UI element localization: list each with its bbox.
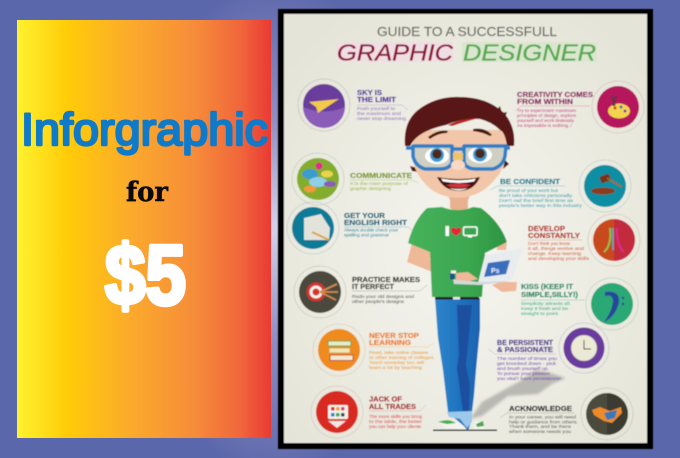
item: sky is the limit: the maximum and [357, 111, 402, 116]
item: be persistent and passionate: you vital? have persistence! [497, 376, 561, 381]
hair [405, 97, 514, 146]
item: develop constantly: DEVELOP [528, 226, 565, 233]
item: jack of all trades: ALL TRADES [369, 404, 416, 411]
item: get your english right [287, 202, 408, 254]
item: practice makes it perfect [294, 266, 420, 318]
item: never stop learning: LEARNING [369, 340, 412, 347]
item: acknowledge: help or guidance from others. [509, 420, 578, 424]
item: be persistent and passionate: To pursue your passion [497, 371, 550, 376]
item: practice makes it perfect: PRACTICE MAKES [352, 277, 420, 284]
item: develop constantly: and developing your skills [528, 256, 590, 261]
item: sky is the limit: Push yourself to [357, 106, 395, 111]
price: $5: $5 [105, 228, 186, 322]
item: develop constantly: it all, things evolve and [528, 246, 585, 251]
item: practice makes it perfect: other people's designs [352, 299, 405, 304]
poster title: GRAPHIC [337, 40, 453, 66]
heading: Inforgraphic: Inforgraphic [21, 104, 268, 155]
item: creativity comes from within: As impossible is nothing..! [517, 123, 572, 128]
item: never stop learning: learn a lot by teaching [369, 365, 423, 370]
item: be persistent and passionate: & PASSIONATE [497, 347, 553, 354]
item: communicate: It is the main purpose of [350, 181, 409, 186]
neck [446, 190, 472, 211]
item: kiss: Keep it fresh and be [521, 306, 568, 311]
icon: palette [592, 81, 644, 133]
mouth [437, 177, 480, 191]
item: be persistent and passionate: The number of times you [497, 356, 558, 361]
item: sky is the limit: never stop dreaming [357, 116, 407, 121]
item: jack of all trades: The more skills you bring [369, 414, 422, 419]
poster title [337, 25, 597, 66]
face [412, 130, 507, 198]
item: creativity comes from within: Try to experiment maximum [517, 108, 576, 113]
tablet [453, 248, 523, 285]
item: develop constantly: Don't think you know [528, 241, 571, 246]
item: get your english right: GET YOUR [344, 213, 385, 220]
item: practice makes it perfect: Redo your old designs and [352, 294, 414, 299]
item: never stop learning: Read, take online classes [369, 350, 429, 355]
item: be confident: Don't nail the brief first time as [499, 198, 574, 203]
item: kiss [521, 278, 638, 330]
item: develop constantly [528, 214, 640, 266]
item: be confident: BE CONFIDENT [500, 179, 561, 186]
item: kiss: KISS (KEEP IT [521, 284, 574, 291]
item: acknowledge: ACKNOWLEDGE [509, 406, 572, 413]
arms [407, 243, 478, 282]
item: kiss: straight to point [521, 311, 559, 316]
item: acknowledge [509, 388, 633, 440]
item: be confident: Be proud of your work but [499, 188, 559, 193]
icon: paper plane [298, 79, 350, 131]
item: never stop learning: NEVER STOP [369, 333, 419, 340]
floor line [433, 430, 497, 431]
item: acknowledge: Thank them, and be there [509, 424, 572, 429]
item: jack of all trades [311, 386, 423, 438]
icon: paper and pencil [287, 202, 339, 254]
icon: clock [559, 323, 609, 373]
tablet: Ps [491, 268, 500, 275]
item: creativity comes from within: yourself and work tirelessly [517, 118, 575, 123]
t-shirt [408, 207, 507, 297]
panel: poster [278, 9, 653, 449]
icon: speech bubbles [292, 153, 344, 205]
item: kiss: SIMPLE,SILLY!) [521, 292, 578, 299]
hand and watch [456, 272, 478, 281]
shirt print: I love screen [446, 226, 477, 238]
item: creativity comes from within [517, 81, 644, 133]
icon: handshake [581, 388, 633, 440]
item: creativity comes from within: CREATIVITY COMES [517, 92, 593, 99]
lenses [413, 146, 452, 169]
icon: gavel [579, 160, 631, 212]
eyebrows [428, 131, 448, 139]
item: never stop learning [313, 324, 435, 376]
icon: target [294, 266, 346, 318]
item: acknowledge: when someone needs you [509, 429, 572, 434]
icon: colour swatches [311, 386, 363, 438]
item: acknowledge: In your career, you will need [509, 414, 577, 420]
item: develop constantly: change. Keep learning [528, 251, 582, 256]
item: jack of all trades: you can help your clients [369, 424, 422, 429]
jeans [435, 298, 480, 431]
item: never stop learning: or other training of colleges. [369, 355, 435, 360]
item: be confident: people's better way in this industry [499, 203, 583, 208]
item: sky is the limit: THE LIMIT [357, 97, 397, 104]
eyes [425, 148, 449, 164]
text: for: for [126, 177, 169, 208]
item: be persistent and passionate: and brush yourself up. [497, 366, 549, 371]
icon: books [313, 324, 365, 376]
poster title: GUIDE TO A SUCCESSFULL [377, 25, 557, 39]
item: creativity comes from within: FROM WITHIN [517, 99, 573, 106]
icon: colored arcs [588, 214, 640, 266]
item: sky is the limit [298, 79, 407, 131]
item: get your english right: spelling and grammar [344, 232, 389, 238]
nose [453, 153, 463, 160]
glasses [406, 146, 510, 169]
item: sky is the limit: SKY IS [357, 90, 382, 97]
item: jack of all trades: to the table, the better [369, 419, 423, 424]
side hair tufts [410, 160, 509, 186]
shadow of character [470, 370, 566, 419]
item: communicate: COMMUNICATE [350, 173, 412, 180]
item: be confident [499, 160, 631, 212]
icon: bass clef [586, 278, 638, 330]
item: develop constantly: CONSTANTLY [528, 233, 580, 240]
item: be persistent and passionate: get knocked down - pick [497, 361, 557, 366]
item: be persistent and passionate [497, 323, 609, 381]
item: creativity comes from within: principles of design, explore [517, 113, 576, 118]
character [405, 97, 523, 431]
item: kiss: Simplicity attracts all. [521, 301, 571, 306]
item: get your english right: ENGLISH RIGHT [344, 220, 408, 227]
item: be persistent and passionate: BE PERSISTENT [497, 340, 554, 347]
item: jack of all trades: JACK OF [369, 396, 403, 404]
poster title: DESIGNER [463, 40, 596, 66]
item: be confident: don't take criticisms personally. [499, 193, 573, 198]
item: communicate [292, 153, 412, 205]
panel: price banner [17, 20, 271, 438]
item: communicate: graphic designing [350, 186, 392, 191]
item: practice makes it perfect: IT PERFECT [352, 284, 395, 291]
item: never stop learning: Teach someday too; will [369, 360, 424, 365]
shoes [438, 420, 466, 429]
item: get your english right: Always double check your [344, 228, 398, 232]
